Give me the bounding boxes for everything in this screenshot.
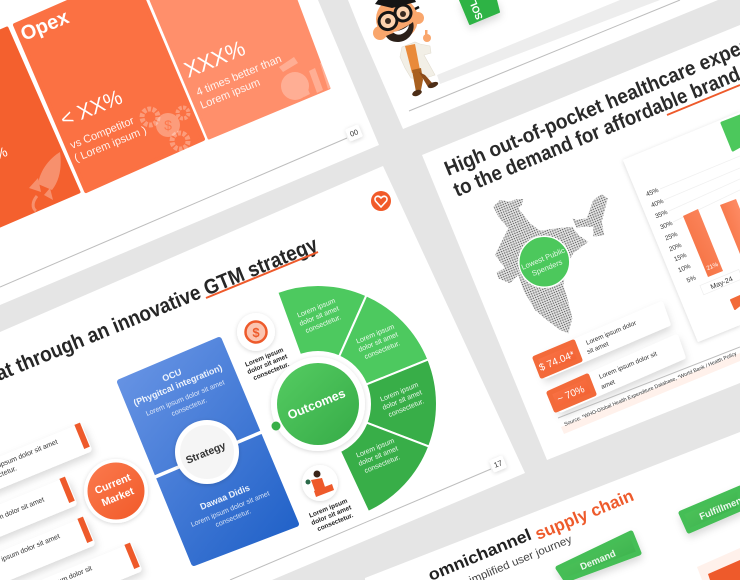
strategy circle — [175, 420, 239, 484]
stat card: 74.04: sit amet — [586, 341, 610, 356]
axis labels: 15% — [673, 252, 688, 263]
caption: dollar badge: Lorem ipsum — [244, 347, 285, 369]
strategy circle: Strategy — [184, 440, 228, 467]
current market circle — [84, 459, 148, 523]
stat card: 74.04: Lorem ipsum dolor — [585, 319, 638, 347]
heading: OCU: OCU — [161, 367, 183, 384]
caption: Lorem ipsum: Lorem ipsum — [199, 77, 262, 112]
slide: healthcare expenditure — [422, 25, 740, 460]
icon: dollar badge — [237, 313, 275, 351]
page number: 00 — [345, 124, 363, 142]
sector text three: consectetur. — [388, 398, 425, 419]
sector text three — [379, 382, 425, 419]
stat card: 70 percent: amet — [600, 379, 616, 391]
caption: dawaa didi badge: consectetur. — [316, 512, 355, 533]
caption: Lorem ipsum: ( Lorem ipsum ) — [73, 124, 148, 165]
text: consectetur: consectetur. — [171, 397, 208, 418]
caption: vs Competitor: vs Competitor — [69, 115, 136, 152]
current market circle: Current — [93, 471, 133, 497]
sector text two: Lorem ipsum — [355, 324, 396, 346]
icon: gears with dollar: $ — [164, 117, 172, 133]
footer rule — [0, 138, 347, 287]
axis labels: 25% — [664, 231, 679, 242]
current market circle: Market — [100, 485, 136, 509]
market card two — [0, 476, 78, 551]
slide: omnichannel supply chain — [365, 432, 740, 580]
axis labels: 10% — [677, 263, 692, 274]
stat card: 70 percent — [549, 337, 683, 410]
axis labels: 40% — [650, 198, 665, 209]
card: Opex — [15, 0, 203, 191]
slide: financial cards — [0, 0, 379, 305]
grid lines — [660, 156, 740, 222]
bar: May-24 first — [683, 209, 723, 277]
outcomes circle — [265, 351, 371, 457]
icon: dollar badge: $ — [252, 325, 260, 340]
button: Demand: Demand — [579, 548, 618, 573]
axis labels — [645, 187, 697, 285]
text: lorem line: Lorem ipsum dolor sit amet — [145, 379, 226, 418]
text: consectetur: consectetur. — [215, 508, 252, 529]
page number: 00: 00 — [348, 127, 360, 139]
slide: doctor and solution — [348, 0, 718, 129]
fan chart: outcomes — [277, 285, 437, 512]
sector text two: consectetur. — [364, 340, 401, 361]
sector text four: consectetur. — [364, 454, 401, 475]
sector text one — [296, 298, 342, 335]
title: at through an innovative GTM strategy — [0, 233, 321, 386]
caption: dawaa didi badge — [308, 498, 355, 533]
icon: doctor character — [370, 0, 439, 97]
bar value: 21% — [706, 262, 720, 272]
green solution tag — [460, 0, 499, 24]
axis labels: 35% — [654, 209, 669, 220]
market card three — [0, 516, 96, 580]
orange tag — [731, 296, 740, 309]
sector text one: consectetur. — [305, 314, 342, 335]
button: Fulfillment — [681, 488, 740, 531]
page number: 17 — [489, 455, 507, 473]
market card one — [0, 422, 93, 497]
caption: dollar badge: dolor sit amet — [246, 353, 289, 376]
caption: dawaa didi badge: dolor sit amet — [310, 504, 353, 527]
caption: dollar badge: consectetur. — [252, 361, 291, 382]
value: XX%: < XX% — [57, 86, 126, 132]
axis label: May-24 — [700, 269, 740, 295]
sector text four: Lorem ipsum — [355, 438, 396, 460]
callout: lowest public spenders — [519, 236, 570, 287]
brand tile — [697, 548, 740, 580]
title underline — [206, 252, 318, 298]
title underline — [667, 85, 740, 115]
market card four — [18, 542, 143, 580]
inner band — [437, 0, 660, 84]
icon: money bag and bars — [279, 57, 334, 100]
sector text three: dolor sit amet — [382, 389, 423, 412]
slide: GTM strategy — [0, 166, 525, 580]
logo — [371, 191, 391, 211]
axis labels: 45% — [645, 187, 660, 198]
caption: dawaa didi badge: Lorem ipsum — [308, 498, 349, 520]
title orange: supply chain — [532, 486, 637, 544]
axis labels: 30% — [659, 220, 674, 231]
stat card: 74.04: $ 74.04* — [538, 349, 576, 374]
footer rule — [558, 347, 740, 418]
sector text one: dolor sit amet — [299, 305, 340, 328]
axis label: May-24: May-24 — [710, 276, 734, 291]
heading: Phygital: (Phygitcal integration) — [132, 363, 224, 408]
connector dot — [272, 422, 280, 430]
panel: bar chart — [623, 112, 740, 342]
sector text one: Lorem ipsum — [296, 298, 337, 320]
source note: Source: *WHO-Global Health Expenditure Database, *World Bank / Health Policy — [563, 351, 738, 428]
card: first orange — [0, 28, 79, 226]
sector text three: Lorem ipsum — [379, 382, 420, 404]
stat card: 70 percent: Lorem ipsum dolor sit — [598, 351, 658, 381]
page number: 17: 17 — [492, 458, 504, 470]
heading: Opex: Opex — [18, 6, 72, 46]
card: XXX% — [151, 0, 334, 138]
outcomes circle: Outcomes — [286, 386, 347, 422]
sector text four: dolor sit amet — [358, 445, 399, 468]
axis labels: 20% — [668, 242, 683, 253]
icon: gears with dollar — [142, 108, 188, 149]
divider to outcomes — [155, 426, 276, 477]
footer rule — [230, 469, 491, 580]
button: Demand — [558, 533, 639, 580]
callout: lowest public spenders: Lowest Public — [520, 246, 566, 272]
callout: lowest public spenders: Spenders — [530, 257, 564, 278]
caption: 4 times better: 4 times better than — [195, 53, 283, 99]
green button — [722, 116, 740, 150]
value: XXX%: XXX% — [180, 35, 249, 83]
icon: rocket — [29, 152, 61, 211]
heading: Dawaa Didis: Dawaa Didis — [198, 483, 251, 512]
text: lorem line: Lorem ipsum dolor sit amet — [190, 490, 271, 529]
map: India dotted — [493, 194, 608, 333]
panel: blue strategy card — [120, 340, 296, 563]
caption: dollar badge — [244, 347, 291, 382]
coat — [400, 42, 435, 79]
sector text two — [355, 324, 401, 361]
footer rule — [409, 0, 680, 111]
stat card: 70 percent: ~ 70% — [556, 384, 586, 405]
bar: second — [720, 199, 740, 254]
sector text two: dolor sit amet — [358, 331, 399, 354]
axis labels: 5% — [686, 275, 697, 285]
stat card: 74.04 — [535, 304, 668, 376]
sector text four — [355, 438, 401, 475]
icon: dawaa didi badge — [302, 465, 338, 501]
